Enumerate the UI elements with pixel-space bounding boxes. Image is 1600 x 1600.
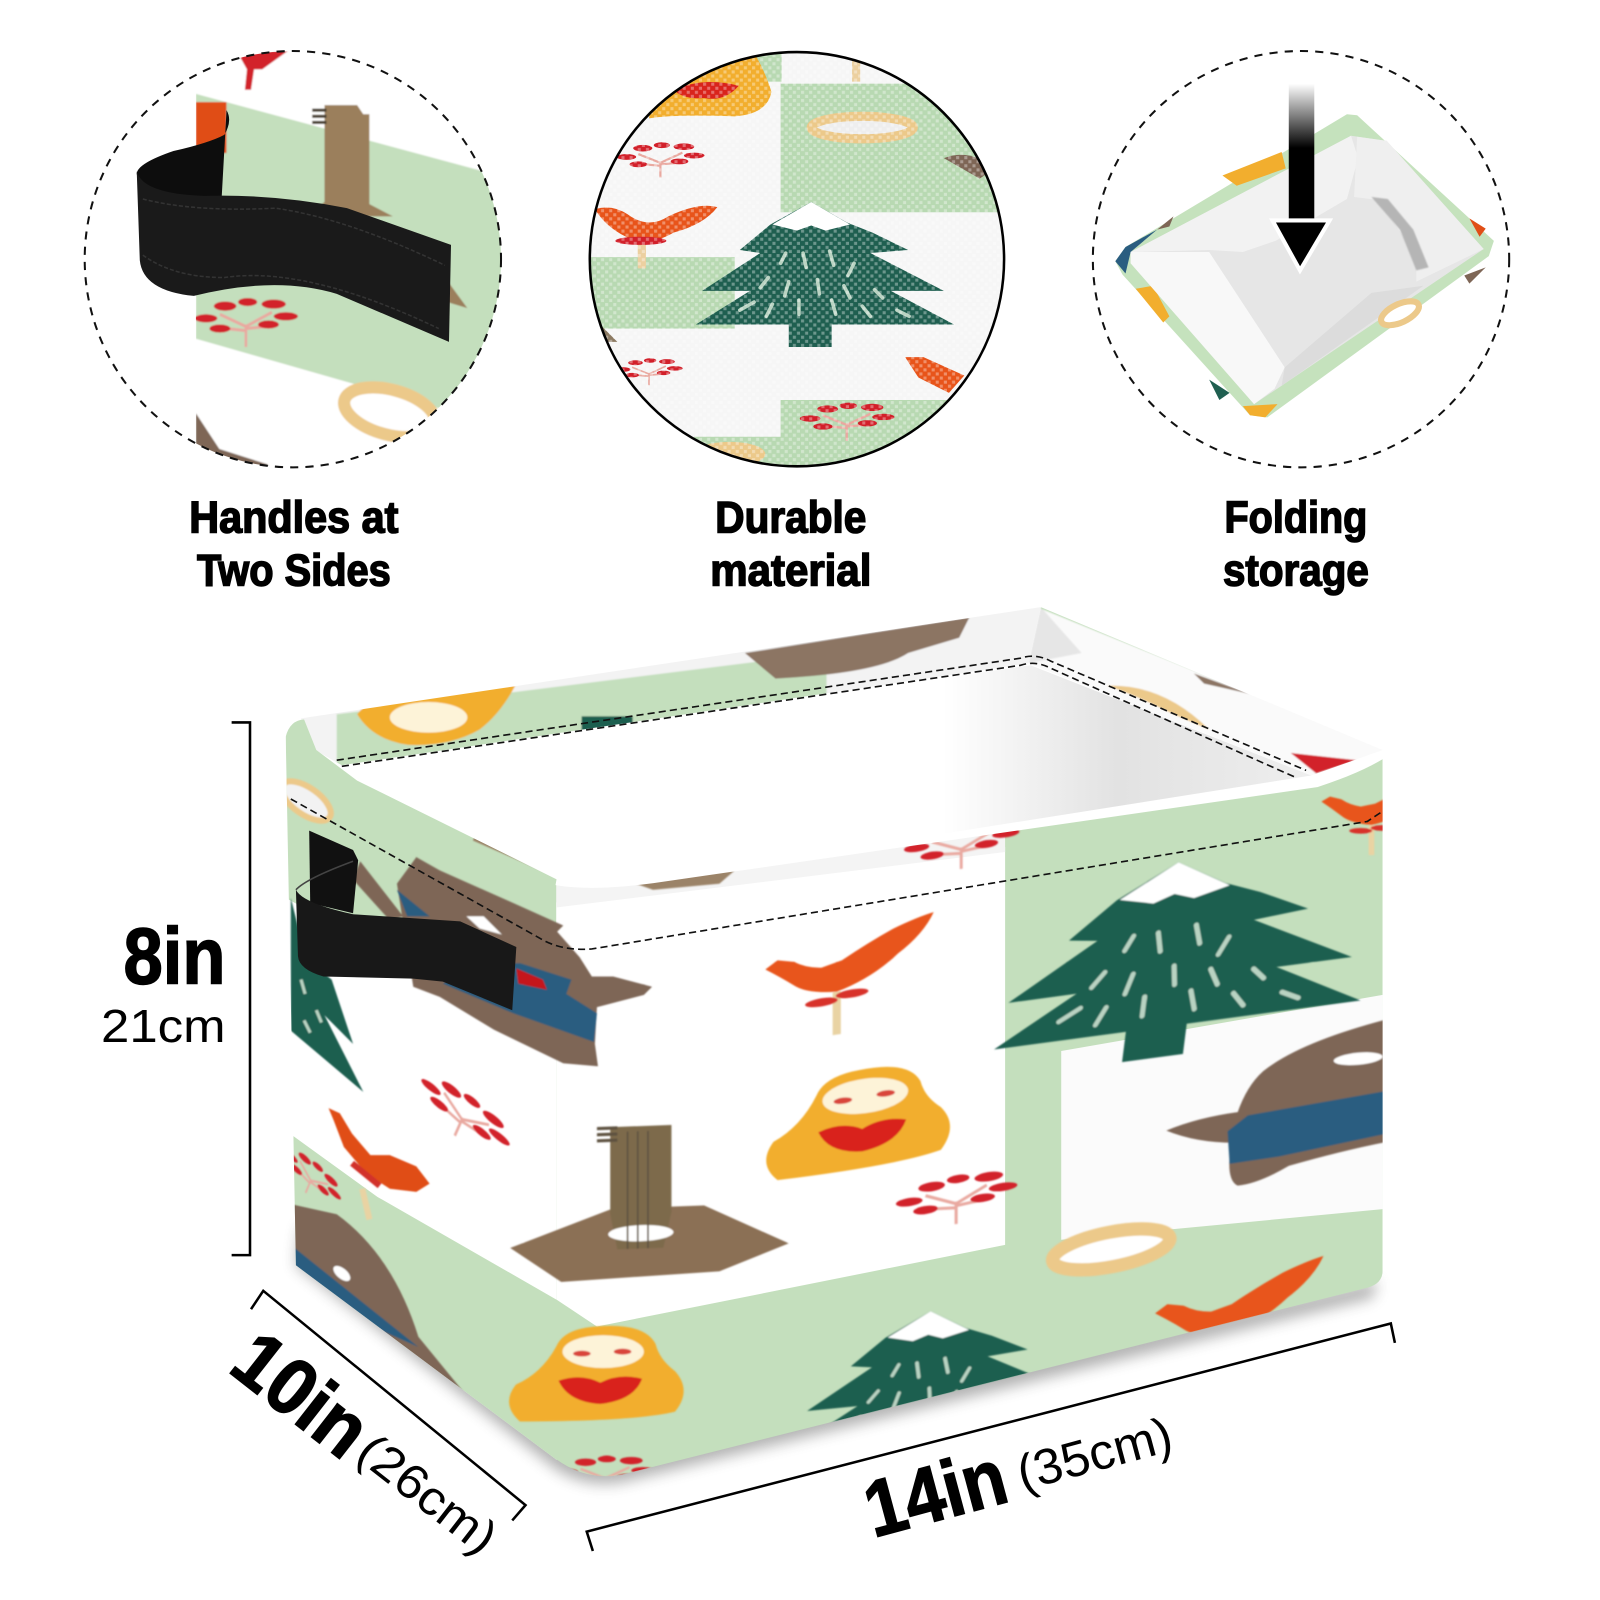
lower side bear <box>291 1204 464 1393</box>
dashed circle <box>1093 51 1509 467</box>
dimension: height <box>101 722 250 1255</box>
bracket <box>232 722 250 1255</box>
side rooster <box>329 1108 430 1219</box>
metric: (26cm) <box>347 1424 507 1565</box>
fabric swatch <box>591 54 1002 465</box>
basket interior <box>342 665 1311 882</box>
value: 8in <box>123 912 226 1001</box>
side wall <box>286 720 557 1460</box>
label: Folding <box>1224 492 1367 543</box>
panel: handles at two sides <box>85 41 512 596</box>
side tree <box>291 898 363 1092</box>
label: Durable <box>715 492 866 543</box>
label: Handles at <box>189 492 399 543</box>
side handle <box>296 831 516 1010</box>
leather handle <box>137 110 451 342</box>
handle close-up fabric <box>137 41 512 480</box>
dimension: width <box>587 1323 1395 1554</box>
front wall <box>556 759 1383 1476</box>
stitching <box>291 656 1383 949</box>
bracket <box>587 1323 1395 1551</box>
motifs crossing the corner <box>353 857 789 1421</box>
lower doll <box>509 1326 684 1421</box>
solid circle <box>590 52 1004 466</box>
shadow <box>296 1224 1378 1484</box>
metric: 21cm <box>101 1000 226 1052</box>
upper side bear <box>353 857 652 1066</box>
basket <box>275 602 1439 1495</box>
bracket <box>251 1291 526 1520</box>
metric: (35cm) <box>1011 1406 1178 1501</box>
folded basket <box>1115 114 1494 417</box>
panel: folding storage <box>1093 51 1509 596</box>
arrow <box>1272 84 1330 270</box>
rim back-left band <box>301 608 1040 766</box>
dimension: depth <box>216 1291 526 1565</box>
rim back-right band <box>1029 607 1356 774</box>
dashed circle <box>85 51 501 467</box>
label: storage <box>1223 545 1369 596</box>
guitar <box>510 1121 789 1284</box>
side berries <box>420 1078 511 1146</box>
front motifs <box>994 862 1361 1064</box>
white rim highlight <box>556 755 1383 884</box>
label: material <box>710 545 871 596</box>
panel: durable material <box>582 41 1020 596</box>
value: 14in <box>855 1431 1016 1554</box>
value: 10in <box>216 1314 387 1475</box>
label: Two Sides <box>197 545 391 596</box>
